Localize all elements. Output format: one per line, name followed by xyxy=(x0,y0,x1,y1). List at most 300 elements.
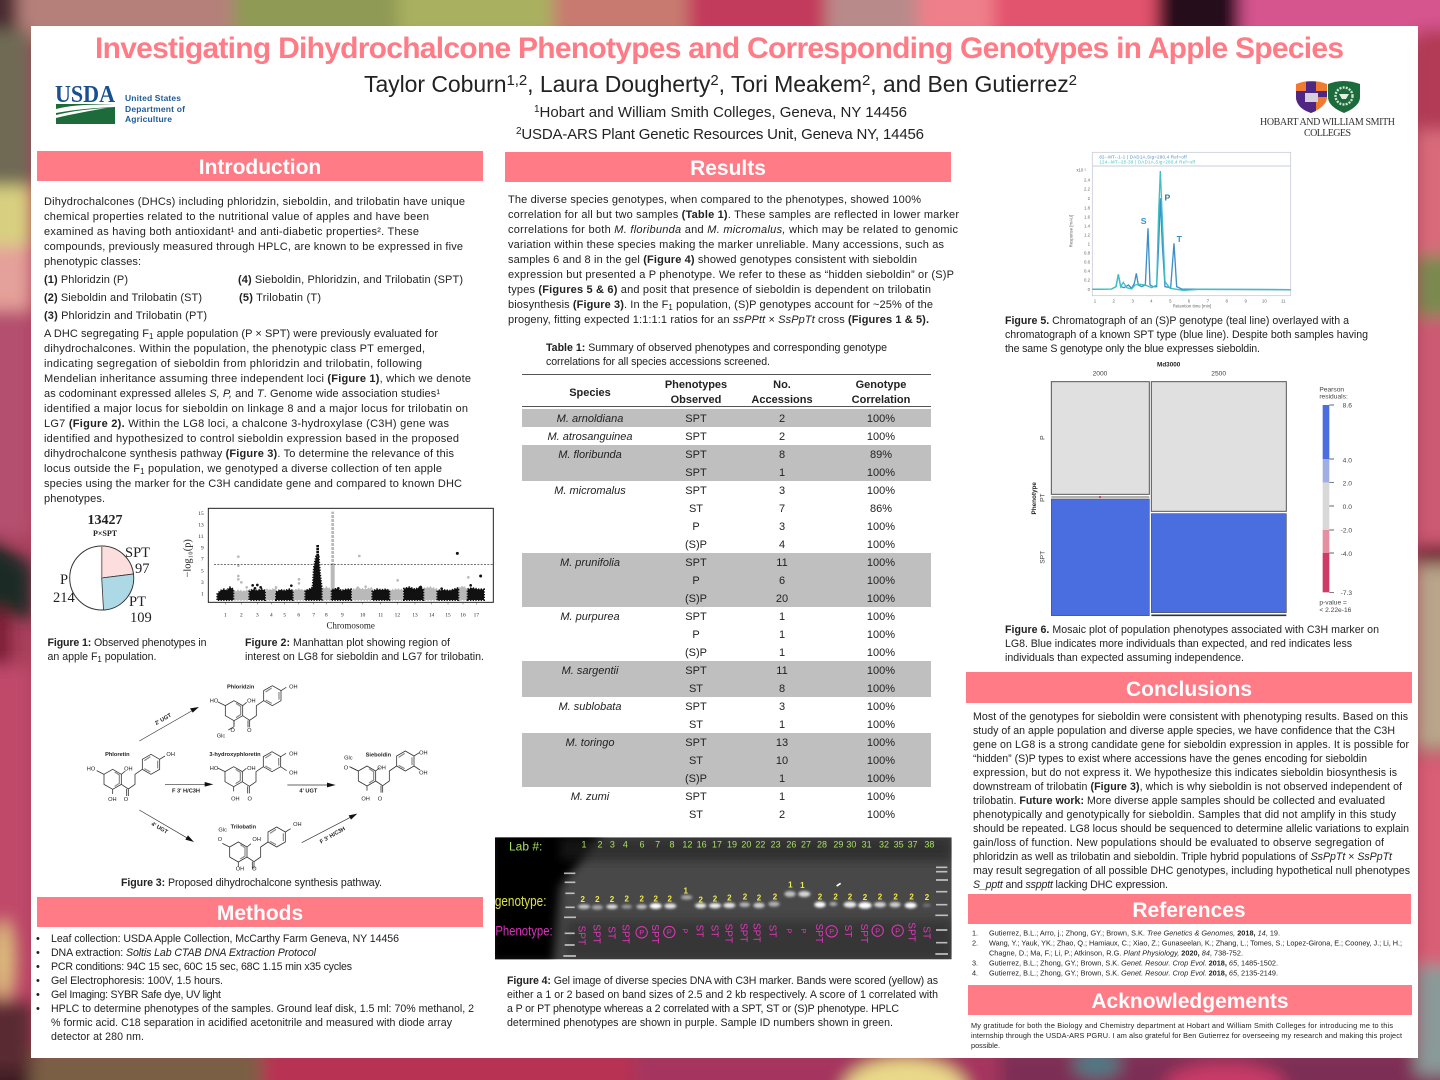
gel phenotype labels: P xyxy=(639,928,644,937)
molecule: trilobatin: OH xyxy=(293,822,302,828)
table header: No. xyxy=(773,379,791,391)
gel phenotype labels: P xyxy=(667,928,672,937)
table accessions column: 3 xyxy=(779,521,785,533)
chart: mosaic plot: 4.0 xyxy=(1343,457,1352,464)
gel phenotype labels: Phenotype: xyxy=(495,922,553,938)
chart: mosaic plot: -4.0 xyxy=(1341,551,1352,558)
chart: manhattan plot: Chromosome xyxy=(326,621,375,631)
list: phenotypic classes: (4) Sieboldin, Phloridzin, and Trilobatin (SPT) xyxy=(238,274,463,286)
caption: figure 5: the same S genotype only the blue expresses sieboldin. xyxy=(1005,343,1260,355)
chart: chromatogram: 3 xyxy=(1131,298,1134,303)
molecule: trilobatin: OH xyxy=(252,837,261,843)
table header: Correlation xyxy=(852,394,911,406)
table accessions column: 1 xyxy=(779,773,785,785)
list: references: Gutierrez, B.L.; Arro, j.; Zhong, GY.; Brown, S.K. Tree Genetics & Genomes, 2018, 14, 19. xyxy=(989,928,1280,938)
table correlation column: 100% xyxy=(867,737,895,749)
gel lab number labels: 7 xyxy=(655,839,660,849)
text block: conclusions: expression, but do not express it. We hypothesize this indicates sieboldin biosynthesis is xyxy=(973,767,1397,779)
chart: manhattan plot: 11 xyxy=(198,534,204,540)
affiliations: Hobart and William Smith Colleges, Geneva, NY 14456 xyxy=(540,104,907,121)
authors: , Laura Dougherty xyxy=(527,71,711,97)
table phenotypes column: ST xyxy=(689,755,703,767)
table phenotypes column xyxy=(685,413,707,821)
table correlation column: 100% xyxy=(867,773,895,785)
molecule: phloridzin: HO xyxy=(210,699,219,705)
gel genotype scores: 2 xyxy=(878,892,883,901)
caption: figure 4: determined phenotypes are shown in purple. Sample ID numbers shown in green. xyxy=(507,1017,893,1029)
table header: Genotype xyxy=(856,379,906,391)
chart: pie of observed phenotypes: P×SPT xyxy=(93,529,118,538)
gel lab number labels: 6 xyxy=(639,839,644,849)
panel: acknowledgements xyxy=(968,985,1412,1050)
panel: methods xyxy=(36,897,483,1043)
list: references: Gutierrez, B.L.; Zhong, GY.; Brown, S.K. Genet. Resour. Crop Evol. 2018, 65, 2135-2149. xyxy=(989,968,1278,978)
text block: conclusions: downstream of trilobatin (Figure 3), which is why sieboldin is not observed independent of xyxy=(973,781,1402,793)
gel lab number labels: 3 xyxy=(610,839,615,849)
arrow: phloretin to trilobatin: 4' UGT xyxy=(150,821,169,836)
table accessions column: 1 xyxy=(779,791,785,803)
arrow: phloretin to phloridzin xyxy=(139,707,199,741)
text block: introduction second paragraph: indicating segregation of sieboldin from phloridzin and trilobatin, following xyxy=(44,358,422,370)
molecule: 3-hydroxyphloretin: OH xyxy=(247,766,256,772)
list: references: 2. xyxy=(972,938,978,948)
gel phenotype labels xyxy=(495,922,931,945)
table phenotypes column: (S)P xyxy=(685,539,707,551)
gel lab number labels: 8 xyxy=(669,839,674,849)
text block: results: correlations for both M. floribunda and M. micromalus, which may be related to genomic xyxy=(508,224,958,236)
text block: introduction first paragraph: chemical properties related to the nutritional value of apples and have been xyxy=(44,211,429,223)
table correlation column: 100% xyxy=(867,413,895,425)
chart: chromatogram: 0.6 xyxy=(1084,260,1091,265)
chart: manhattan plot: 9 xyxy=(341,612,344,618)
chart: manhattan plot: 17 xyxy=(474,612,479,618)
molecule: phloretin: OH xyxy=(124,767,133,773)
gel phenotype labels: P xyxy=(799,929,808,934)
text block: results: types (Figures 5 & 6) and posit that presence of sieboldin is dependent on trilobatin xyxy=(508,284,931,296)
gel genotype scores: 1 xyxy=(788,880,793,889)
table accessions column: 7 xyxy=(779,503,785,515)
molecule: phloretin: O xyxy=(124,797,129,803)
chart: chromatogram: Retention time [min] xyxy=(1173,304,1211,309)
text block: conclusions: “hidden” (S)P types to exist where accessions have the genes encoding for sieboldin xyxy=(973,753,1367,765)
text block: introduction second paragraph: phenotypes. xyxy=(44,493,105,505)
table phenotypes column: P xyxy=(692,521,700,533)
table correlation column: 89% xyxy=(870,449,892,461)
affiliations: 2 xyxy=(516,126,522,137)
list: methods: % formic acid. C18 separation in acidified acetonitrile and measured with diode array xyxy=(51,1017,453,1029)
table phenotypes column: SPT xyxy=(685,557,707,569)
gel genotype scores: 2 xyxy=(909,892,914,901)
list: methods: PCR conditions: 94C 15 sec, 60C 15 sec, 68C 1.15 min x35 cycles xyxy=(51,961,352,973)
gel lab number labels: 22 xyxy=(755,839,765,849)
table accessions column: 11 xyxy=(776,665,788,677)
molecule: sieboldin: OH xyxy=(377,766,386,772)
text block: conclusions: gain/loss of function. New populations should be evaluated to observe segregation of xyxy=(973,837,1384,849)
molecule: trilobatin: OH xyxy=(236,867,244,873)
chart: chromatogram: 1.2 xyxy=(1084,233,1091,238)
caption: figure 5 xyxy=(1005,315,1368,355)
gel genotype scores: 2 xyxy=(595,895,600,904)
chart: pie of observed phenotypes: 97 xyxy=(135,561,150,577)
list: methods: • xyxy=(36,989,40,1001)
table species column: M. zumi xyxy=(571,791,610,803)
table accessions column: 3 xyxy=(779,485,785,497)
chart: manhattan plot: 8 xyxy=(325,612,328,618)
heading: conclusions: Conclusions xyxy=(1126,678,1252,701)
table phenotypes column: SPT xyxy=(685,737,707,749)
molecule: sieboldin: O xyxy=(378,797,383,803)
table species column: M. prunifolia xyxy=(560,557,620,569)
table correlation column: 100% xyxy=(867,485,895,497)
table phenotypes column: (S)P xyxy=(685,773,707,785)
table phenotypes column: (S)P xyxy=(685,647,707,659)
table correlation column: 100% xyxy=(867,809,895,821)
caption: figure 1: 1 xyxy=(97,655,102,664)
affiliations: 1 xyxy=(534,104,540,115)
table species column: M. sublobata xyxy=(559,701,621,713)
molecule: trilobatin: Trilobatin xyxy=(231,824,257,830)
text block: conclusions: Most of the genotypes for sieboldin were consistent with phenotyping results. Based on this xyxy=(973,711,1408,723)
caption: figure 4: either a 1 or 2 based on band sizes of 2.5 and 2 kb respectively. A score of 1 correlated with xyxy=(507,989,938,1001)
chart: mosaic plot: Md3000 xyxy=(1157,362,1181,369)
gel phenotype labels: ST xyxy=(842,925,853,937)
gel phenotype labels: SPT xyxy=(619,924,630,944)
gel lab number labels: 1 xyxy=(581,839,586,849)
heading: conclusions xyxy=(966,672,1412,703)
text block: results: progeny, fitting expected 1:1:1:1 ratios for an ssPPtt × SsPpTt cross (Figures 1 & 5). xyxy=(508,314,929,326)
molecule: 3-hydroxyphloretin: 3-hydroxyphloretin xyxy=(209,752,261,758)
chart: chromatogram: S xyxy=(1141,216,1147,226)
table accessions column xyxy=(776,413,788,821)
table accessions column: 1 xyxy=(779,719,785,731)
text block: conclusions: trilobatin. Future work: More diverse apple samples should be collected and evaluated xyxy=(973,795,1385,807)
logo: USDA: United States xyxy=(125,93,181,103)
table phenotypes column: SPT xyxy=(685,467,707,479)
gel lab number labels xyxy=(509,839,934,854)
text block: introduction second paragraph: identified and hypothesized to control sieboldin expression based in the proposed xyxy=(44,433,459,445)
table species column xyxy=(548,413,632,803)
gel genotype scores: 2 xyxy=(893,892,898,901)
table correlation column: 100% xyxy=(867,575,895,587)
list: references: Chagne, D.; Ma, F.; Li, P.; Atkinson, R.G. Plant Physiology, 2020, 84, 738-752. xyxy=(989,948,1243,958)
heading: references xyxy=(968,894,1411,924)
table accessions column: 1 xyxy=(779,647,785,659)
text block: results: samples 6 and 8 in the gel (Figure 4) showed genotypes consistent with sieboldin xyxy=(508,254,917,266)
gel lab number labels: 27 xyxy=(801,839,811,849)
gel lab number labels: 32 xyxy=(879,839,889,849)
chart: pie of observed phenotypes: 13427 xyxy=(88,513,122,528)
gel lab number labels: 20 xyxy=(741,839,751,849)
gel genotype scores: 2 xyxy=(833,892,838,901)
chart: manhattan plot: 15 xyxy=(198,511,204,517)
table accessions column: 1 xyxy=(779,629,785,641)
chart: chromatogram: 7 xyxy=(1207,298,1210,303)
heading: acknowledgements: Acknowledgements xyxy=(1091,990,1289,1013)
chart: manhattan plot: 13 xyxy=(198,522,204,528)
molecule: phloretin: Phloretin xyxy=(105,752,130,758)
chart: chromatogram: 5 xyxy=(1169,298,1172,303)
gel phenotype labels: SPT xyxy=(576,926,587,945)
chart: chromatogram: 8 xyxy=(1225,298,1228,303)
gel genotype scores: 2 xyxy=(639,895,644,904)
chart: pie of observed phenotypes: 214 xyxy=(53,590,76,606)
panel: references xyxy=(968,894,1411,978)
list: methods: Leaf collection: USDA Apple Collection, McCarthy Farm Geneva, NY 14456 xyxy=(51,933,399,945)
table correlation column: 100% xyxy=(867,683,895,695)
text block: introduction second paragraph: identified a major locus for sieboldin on linkage 8 and a major locus for trilobatin on xyxy=(44,403,468,415)
molecule: 3-hydroxyphloretin: OH xyxy=(289,771,298,777)
chart: manhattan plot: 4 xyxy=(270,612,273,618)
gel genotype scores: 2 xyxy=(863,893,868,902)
gel genotype scores: 2 xyxy=(667,895,672,904)
list: phenotypic classes xyxy=(44,274,463,322)
table phenotypes column: P xyxy=(692,575,700,587)
chart: manhattan plot: 5 xyxy=(283,612,286,618)
list: methods: Gel Imaging: SYBR Safe dye, UV light xyxy=(51,989,221,1001)
table correlation column: 100% xyxy=(867,701,895,713)
chart: manhattan plot: 3 xyxy=(201,580,204,586)
table species column: M. arnoldiana xyxy=(557,413,623,425)
molecule: sieboldin: O xyxy=(344,766,349,772)
heading: references: References xyxy=(1132,899,1246,922)
gel genotype scores: 2 xyxy=(925,893,930,902)
chart: chromatogram: 1 xyxy=(1088,242,1091,247)
molecule: phloridzin: O xyxy=(247,728,252,734)
gel lab number labels: 30 xyxy=(846,839,856,849)
table correlation column: 100% xyxy=(867,539,895,551)
molecule: phloretin: OH xyxy=(166,752,175,758)
molecule: trilobatin: Glc xyxy=(218,827,227,833)
chart: chromatogram: 2 xyxy=(1088,196,1091,201)
text block: results: correlation for all but two samples (Table 1). These samples are reflected in lower marker xyxy=(508,209,959,221)
gel genotype scores: 2 xyxy=(698,896,703,905)
arrow: phloretin to 3-hydroxyphloretin: F 3' H/C3H xyxy=(172,789,200,795)
gel genotype scores: 2 xyxy=(757,894,762,903)
table phenotypes column: P xyxy=(692,629,700,641)
molecule: phloretin xyxy=(87,752,175,803)
text block: results: expression but presented a P phenotype. We refer to these as “hidden sieboldin” or (S)P xyxy=(508,269,954,281)
table header: Accessions xyxy=(751,394,813,406)
molecule: 3-hydroxyphloretin: HO xyxy=(210,766,219,772)
table accessions column: 4 xyxy=(779,539,785,551)
gel genotype scores: 2 xyxy=(713,895,718,904)
table species column: M. purpurea xyxy=(560,611,620,623)
gel phenotype labels: P xyxy=(829,927,834,936)
logo: USDA: Department of xyxy=(125,104,185,114)
text block: results: The diverse species genotypes, when compared to the phenotypes, showed 100% xyxy=(508,194,921,206)
table species column: M. toringo xyxy=(566,737,614,749)
gel lab number labels: 19 xyxy=(727,839,737,849)
panel: conclusions xyxy=(966,672,1412,891)
text block: introduction second paragraph: 1 xyxy=(140,467,145,476)
table correlation column: 100% xyxy=(867,467,895,479)
caption: figure 1: Figure 1: Observed phenotypes in xyxy=(48,637,207,649)
chart: manhattan plot: 7 xyxy=(312,612,315,618)
molecule: trilobatin: O xyxy=(218,837,223,843)
text block: introduction second paragraph: dihydrochalcones. Within the population, the phenotypic class PT emerged, xyxy=(44,343,425,355)
caption: table 1: Table 1: Summary of observed phenotypes and corresponding genotype xyxy=(546,342,887,354)
list: references: 1. xyxy=(972,928,978,938)
chart: chromatogram: 82--MT--1-1 | DAD1A,Sig=280,4 Ref=off xyxy=(1099,154,1187,159)
chart: mosaic plot: residuals: xyxy=(1319,394,1348,401)
gel genotype scores: 2 xyxy=(580,895,585,904)
table phenotypes column: ST xyxy=(689,683,703,695)
arrow: phloretin to phloridzin: 2' UGT xyxy=(154,712,173,727)
molecule: phloridzin: O xyxy=(230,728,235,734)
gel lab number labels: 29 xyxy=(833,839,843,849)
logo: Hobart and William Smith Colleges: COLLEGES xyxy=(1304,128,1351,139)
table phenotypes column: SPT xyxy=(685,413,707,425)
chart: manhattan plot: 10 xyxy=(360,612,366,618)
gel genotype scores: genotype: xyxy=(495,894,546,910)
chart: mosaic plot: < 2.22e-16 xyxy=(1319,607,1352,614)
chart: chromatogram: 9 xyxy=(1244,298,1247,303)
molecule: phloridzin xyxy=(210,685,298,739)
chart: manhattan plot: 11 xyxy=(378,612,384,618)
table correlation column: 100% xyxy=(867,557,895,569)
table phenotypes column: ST xyxy=(689,503,703,515)
gel phenotype labels: SPT xyxy=(858,924,869,943)
chart: chromatogram: 10 xyxy=(1262,298,1267,303)
table phenotypes column: SPT xyxy=(685,449,707,461)
chart: mosaic plot: 8.6 xyxy=(1343,403,1352,410)
molecule: sieboldin: Sieboldin xyxy=(366,753,392,759)
gel lab number labels: 2 xyxy=(597,839,602,849)
gel phenotype labels: SPT xyxy=(591,924,602,944)
arrow: 3-hydroxyphloretin to sieboldin: 4' UGT xyxy=(299,789,318,795)
gel genotype scores: 2 xyxy=(610,895,615,904)
text block: results: 1 xyxy=(668,303,673,312)
text block: introduction second paragraph: as codominant expressed alleles S, P, and T. Genome wide association studies¹ xyxy=(44,388,440,400)
chart: manhattan plot: 6 xyxy=(297,612,300,618)
chart: chromatogram: 2.2 xyxy=(1084,187,1091,192)
text block: acknowledgements: possible. xyxy=(971,1041,1000,1050)
gel genotype scores: 2 xyxy=(773,892,778,901)
chart: chromatogram: 1 xyxy=(1094,298,1097,303)
chart: chromatogram: 1.8 xyxy=(1084,205,1091,210)
chart: mosaic plot xyxy=(1031,362,1352,616)
list: methods: • xyxy=(36,947,40,959)
heading: acknowledgements xyxy=(968,985,1412,1015)
gel phenotype labels: SPT xyxy=(737,923,748,942)
chart: chromatogram: 0.4 xyxy=(1084,269,1091,274)
authors: 2 xyxy=(710,72,719,89)
table correlation column xyxy=(867,413,895,821)
table correlation column: 100% xyxy=(867,593,895,605)
chart: manhattan plot: 5 xyxy=(201,568,204,574)
caption: figure 5: chromatograph of a known SPT type (blue line). Despite both samples having xyxy=(1005,329,1368,341)
list: methods: • xyxy=(36,933,40,945)
arrow: 3-hydroxyphloretin to sieboldin xyxy=(287,783,336,795)
caption: figure 2 xyxy=(245,637,484,663)
table correlation column: 86% xyxy=(870,503,892,515)
chart: chromatogram: 6 xyxy=(1188,298,1191,303)
table correlation column: 100% xyxy=(867,629,895,641)
text block: introduction second paragraph: Mendelian inheritance assuming three independent loci (Figure 1), which we denote xyxy=(44,373,471,385)
gel lab number labels: 12 xyxy=(682,839,692,849)
molecule: sieboldin: OH xyxy=(419,771,428,777)
table correlation column: 100% xyxy=(867,719,895,731)
molecule: phloretin: OH xyxy=(108,797,117,803)
caption: figure 6: individuals than expected assuming independence. xyxy=(1005,652,1244,664)
gel phenotype labels: ST xyxy=(920,926,931,939)
list: phenotypic classes: (1) Phloridzin (P) xyxy=(44,274,128,286)
logo: USDA: Agriculture xyxy=(125,114,172,124)
table accessions column: 13 xyxy=(776,737,788,749)
text block: conclusions: S_pptt and sspptt lacking DHC expression. xyxy=(973,879,1168,891)
caption: figure 6: Figure 6. Mosaic plot of population phenotypes associated with C3H marker on xyxy=(1005,624,1379,636)
table correlation column: 100% xyxy=(867,431,895,443)
list: methods: • xyxy=(36,1003,40,1015)
text block: results: population, (S)P genotypes account for ~25% of the xyxy=(673,299,933,311)
text block: introduction second paragraph: A DHC segregating F xyxy=(44,328,149,340)
chart: manhattan plot: 9 xyxy=(201,545,204,551)
logo: Hobart and William Smith Colleges: HOBART AND WILLIAM SMITH xyxy=(1260,117,1395,128)
list: phenotypic classes: (5) Trilobatin (T) xyxy=(239,292,321,304)
table correlation column: 100% xyxy=(867,611,895,623)
gel lab number labels: Lab #: xyxy=(509,840,542,854)
table species column: M. micromalus xyxy=(554,485,626,497)
diagram: dihydrochalcone synthesis pathway xyxy=(87,685,428,873)
chart: pie of observed phenotypes xyxy=(53,513,152,626)
chart: manhattan plot: 16 xyxy=(460,612,466,618)
gel phenotype labels: ST xyxy=(694,925,705,937)
table accessions column: 1 xyxy=(779,611,785,623)
gel phenotype labels: ST xyxy=(606,926,617,939)
text block: conclusions: gene on LG8 is a strong candidate gene for sieboldin expression in apples. It is possible for xyxy=(973,739,1409,751)
logo: Hobart and William Smith Colleges xyxy=(1260,81,1395,139)
text block: introduction second paragraph: dihydrochalcone synthesis pathway (Figure 3). To determine the relevance of this xyxy=(44,448,454,460)
chart: mosaic plot: Phenotype xyxy=(1031,482,1038,515)
chart: chromatogram: 0.2 xyxy=(1084,278,1091,283)
affiliations: USDA-ARS Plant Genetic Resources Unit, Geneva NY, 14456 xyxy=(521,126,924,143)
gel genotype scores: 2 xyxy=(743,892,748,901)
arrow: trilobatin to sieboldin xyxy=(302,814,357,845)
table correlation column: 100% xyxy=(867,791,895,803)
caption: table 1: correlations for all species accessions screened. xyxy=(546,356,770,368)
chart: chromatogram: 11 xyxy=(1281,298,1286,303)
caption: figure 4 xyxy=(507,975,938,1029)
chart: mosaic plot: 2000 xyxy=(1093,370,1108,377)
caption: figure 2: Figure 2: Manhattan plot showing region of xyxy=(245,637,450,649)
table correlation column: 100% xyxy=(867,665,895,677)
caption: figure 6: LG8. Blue indicates more individuals than expected, and red indicates less xyxy=(1005,638,1352,650)
gel genotype scores: 2 xyxy=(848,892,853,901)
chart: chromatogram: 0 xyxy=(1088,287,1091,292)
molecule: sieboldin: Glc xyxy=(344,755,353,761)
chart: manhattan plot: 12 xyxy=(395,612,400,618)
text block: conclusions: study of an apple population and diverse apple species, we have confidence that the C3H xyxy=(973,725,1395,737)
list: methods: • xyxy=(36,975,40,987)
list: references: 3. xyxy=(972,958,978,968)
affiliations xyxy=(516,104,924,143)
chart: chromatogram: 2.4 xyxy=(1084,178,1091,183)
caption: table 1 xyxy=(546,342,887,368)
authors: , and Ben Gutierrez xyxy=(870,71,1069,97)
chart: mosaic plot: SPT xyxy=(1039,551,1046,564)
chart: chromatogram: P xyxy=(1164,193,1170,203)
list: references: Gutierrez, B.L.; Zhong, GY.; Brown, S.K. Genet. Resour. Crop Evol. 2018, 65, 1485-1502. xyxy=(989,958,1278,968)
table accessions column: 1 xyxy=(779,467,785,479)
gel phenotype labels: ST xyxy=(767,925,778,937)
chart: mosaic plot: Pearson xyxy=(1319,386,1344,393)
text block: introduction first paragraph: Dihydrochalcones (DHCs) including phloridzin, sieboldin, and trilobatin have unique xyxy=(44,196,465,208)
list: methods xyxy=(36,933,474,1043)
molecule: 3-hydroxyphloretin: O xyxy=(247,797,252,803)
gel lab number labels: 23 xyxy=(771,839,781,849)
caption: figure 4: Figure 4: Gel image of diverse species DNA with C3H marker. Bands were scored (yellow) as xyxy=(507,975,938,987)
table header xyxy=(569,379,911,406)
